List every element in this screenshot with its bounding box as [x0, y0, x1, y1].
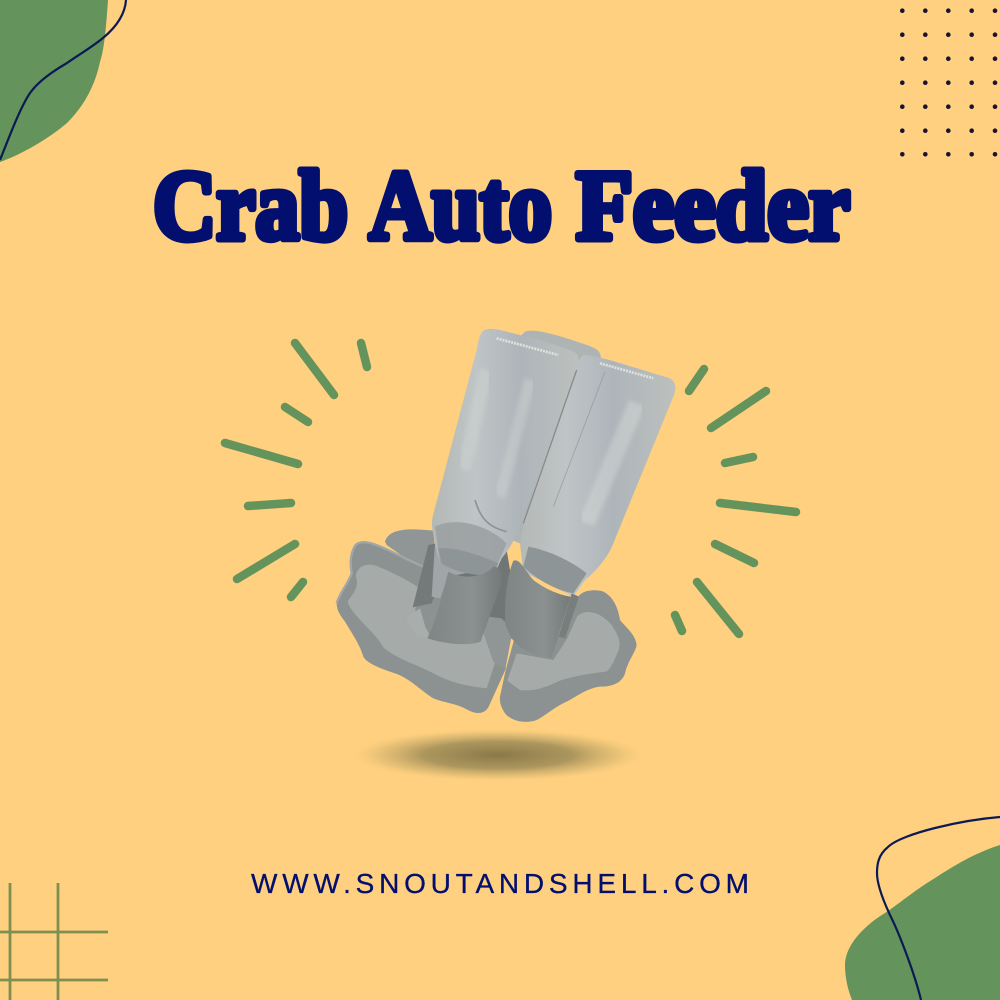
back tray: [385, 529, 437, 568]
bottom-right blob and curve: [845, 817, 1000, 1000]
ground shadow: [348, 728, 648, 782]
product: crab auto feeder: [337, 329, 675, 722]
back bottle: [470, 331, 601, 543]
title: Crab: [153, 150, 348, 261]
left tray: [337, 542, 506, 713]
top-left blob and curve: [0, 0, 126, 162]
left bottle neck: [432, 543, 498, 598]
front-left bottle: [432, 329, 579, 575]
dot grid: [900, 8, 997, 157]
title: Feeder: [576, 150, 850, 261]
bottom-left grid lines: [0, 883, 108, 1000]
front-right bottle: [520, 355, 675, 597]
right bottle holder: [505, 560, 579, 657]
center clip: [480, 617, 513, 669]
right tray: [500, 590, 637, 722]
left bottle holder: [406, 567, 502, 644]
title: [153, 150, 850, 261]
burst rays around product: [225, 343, 796, 634]
dark core between holders: [420, 550, 520, 643]
website url: WWW.SNOUTANDSHELL.COM: [251, 868, 749, 899]
title: Auto: [369, 150, 552, 261]
left holder back wall: [413, 543, 443, 607]
